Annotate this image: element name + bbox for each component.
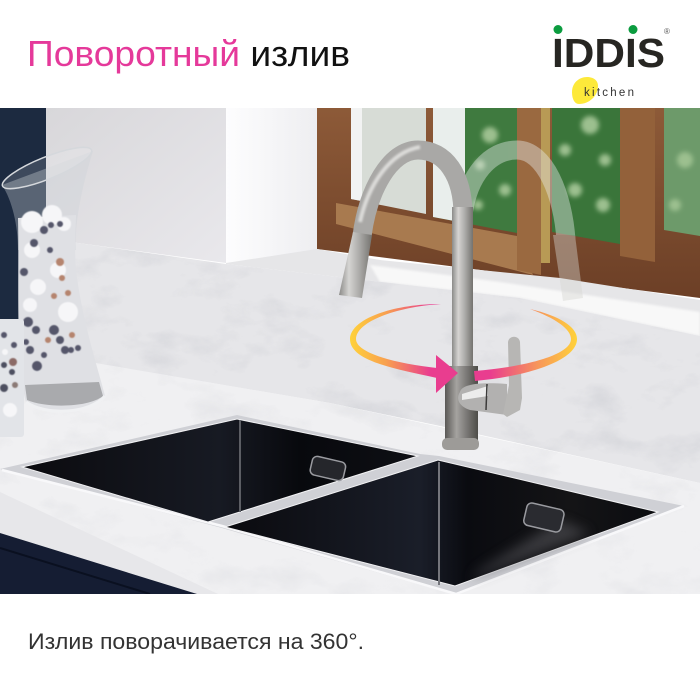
lever <box>503 337 522 417</box>
sink <box>0 415 684 595</box>
ghost spout arc <box>463 150 566 240</box>
window pane 3 <box>552 108 620 244</box>
vase stones <box>20 205 81 371</box>
arrowhead <box>436 355 458 393</box>
vase water <box>25 382 103 406</box>
faucet body <box>445 366 478 442</box>
arrow right half <box>474 309 577 381</box>
marble backsplash <box>46 240 700 483</box>
left drain cover <box>309 455 347 482</box>
green foliage patches <box>473 116 693 212</box>
logo blob: yellow <box>572 77 598 104</box>
caption: Излив поворачивается на 360°. <box>28 629 364 654</box>
handle cartridge <box>458 383 507 415</box>
counter front edge <box>0 492 218 594</box>
right drain cover <box>523 502 565 533</box>
countertop texture <box>204 406 630 591</box>
faucet column <box>452 207 473 370</box>
handle ring <box>486 384 487 410</box>
sink rim highlight <box>2 470 684 594</box>
ghost spout <box>463 150 583 301</box>
sash stile <box>517 108 541 275</box>
window pane 4 <box>664 108 700 236</box>
vase rim <box>0 140 96 196</box>
ledge sunlit patch <box>370 265 700 336</box>
photo: kitchen sink scene <box>0 108 700 595</box>
window <box>317 108 700 298</box>
logo sub-label: kitchen <box>584 87 634 99</box>
logo registered mark: ® <box>664 27 670 36</box>
title: Поворотный излив <box>27 33 350 74</box>
handle shine <box>462 386 488 400</box>
small glass <box>0 319 24 437</box>
faucet spout arc <box>362 150 463 236</box>
backsplash texture <box>86 250 700 457</box>
left basin <box>22 419 418 522</box>
right basin light patch <box>470 520 590 580</box>
rotation arrow <box>350 304 577 393</box>
vase body <box>18 215 105 411</box>
window ledge <box>226 249 700 336</box>
vase <box>0 140 105 411</box>
dark cabinet <box>0 533 197 594</box>
dark navy wall <box>0 108 46 319</box>
right basin <box>225 460 658 586</box>
window stile right <box>620 108 655 262</box>
faucet base <box>442 438 479 450</box>
logo wordmark: IDDIS <box>552 30 665 76</box>
pane 1 highlight <box>351 108 362 201</box>
arrow left half <box>350 304 441 378</box>
pane 2 highlight <box>433 108 465 223</box>
arc highlight <box>360 147 420 222</box>
faucet <box>339 147 522 450</box>
countertop <box>0 360 700 594</box>
vase upper glass <box>3 168 76 250</box>
window frame <box>317 108 700 298</box>
gold strip <box>541 108 550 263</box>
cabinet groove <box>0 548 150 594</box>
sink rim <box>0 415 684 595</box>
left basin crease <box>239 420 241 512</box>
white pillar <box>263 108 317 257</box>
white wall <box>46 108 226 263</box>
lower sash rail <box>336 203 533 275</box>
logo: IDDIS kitchen <box>552 25 670 104</box>
window pane 2 <box>433 108 517 233</box>
ghost spout nozzle <box>553 235 583 301</box>
right basin crease <box>438 462 440 585</box>
glass stones <box>0 332 18 417</box>
vase base <box>26 396 105 411</box>
glass body <box>0 319 24 437</box>
logo dot: left <box>554 25 562 34</box>
logo dot: right <box>628 25 638 34</box>
window pane 1 <box>351 108 426 214</box>
pull-down nozzle <box>339 232 372 298</box>
